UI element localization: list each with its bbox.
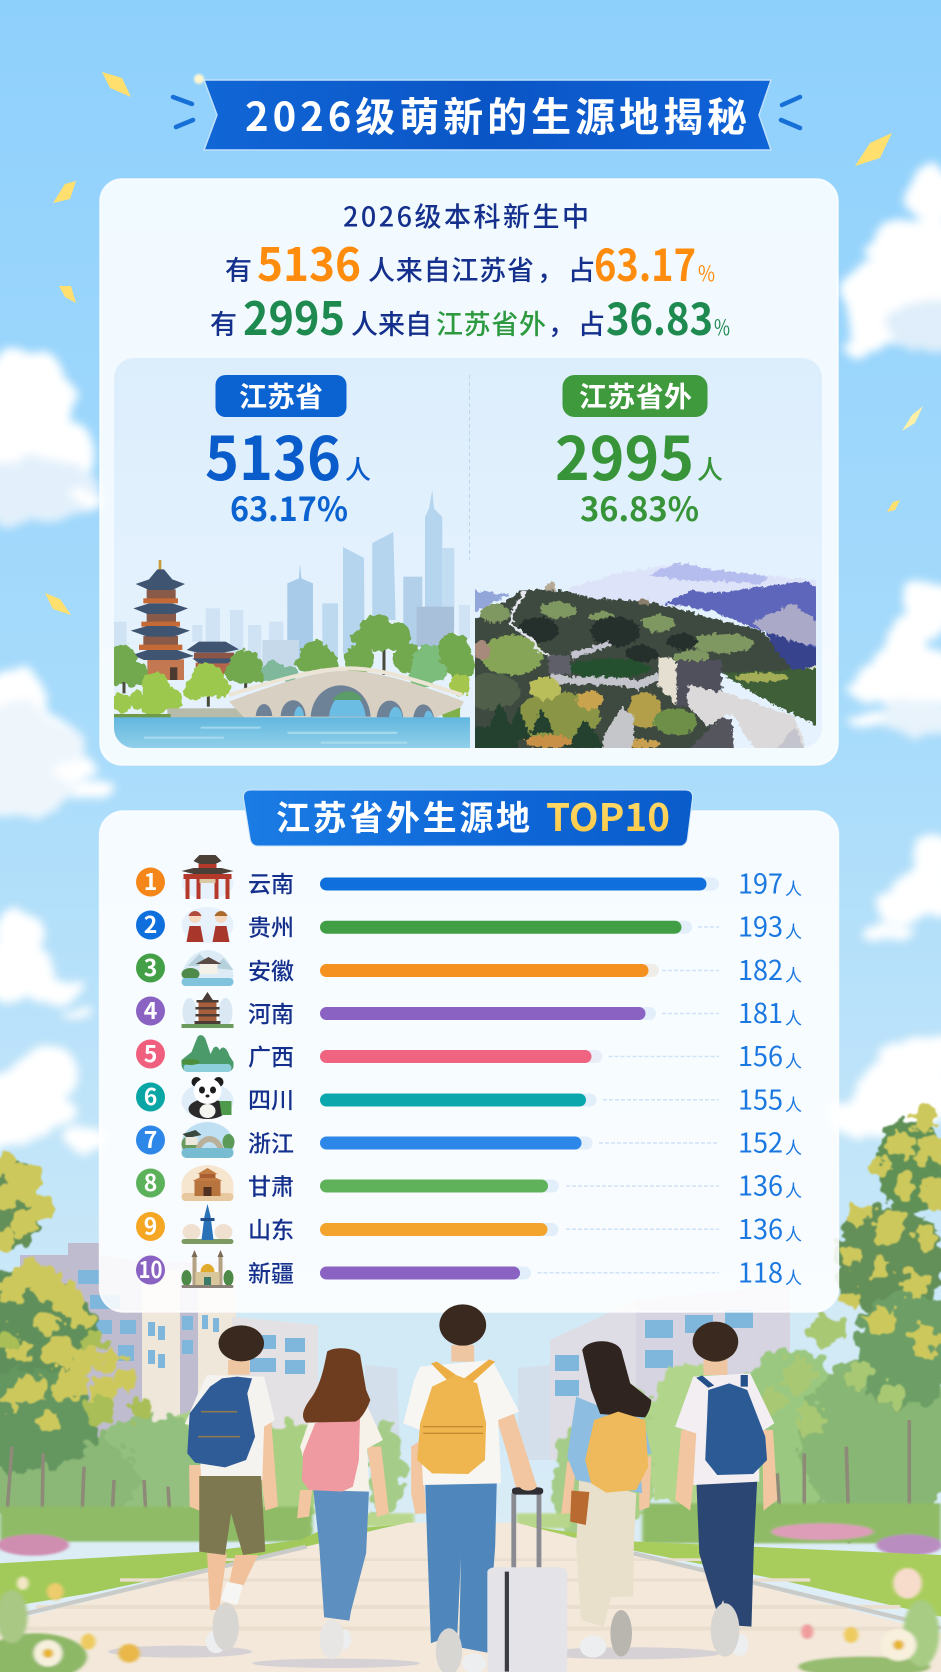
side ticks right [781, 97, 800, 128]
outside Jiangsu sentence [210, 283, 730, 349]
icon: Henan pagoda [182, 992, 234, 1028]
icon: Yunnan memorial gate [182, 855, 234, 899]
Jiangsu sentence [225, 229, 715, 295]
dashed leader [603, 1099, 719, 1101]
label: 甘肃 [248, 1168, 294, 1202]
outside Jiangsu sentence: 36.83 [606, 284, 713, 348]
value: 人 [785, 875, 802, 900]
right column: outside Jiangsu: 人 [697, 450, 723, 487]
label: 新疆 [248, 1254, 294, 1288]
label: 云南 [248, 865, 294, 899]
count: 5136 [205, 411, 341, 498]
Jiangsu sentence: % [698, 258, 715, 288]
value: 人 [785, 1220, 802, 1246]
row 6 四川: 6 [144, 1078, 157, 1112]
icon: Zhejiang water town bridge [182, 1122, 234, 1158]
Jiangsu sentence: 有 [225, 249, 252, 288]
row 5 广西 [136, 1035, 802, 1074]
row 2 贵州 [136, 906, 802, 945]
ground shadows [108, 1646, 720, 1668]
title banner [173, 74, 800, 150]
Jiangsu sentence: ， [537, 249, 564, 288]
bar [320, 921, 692, 934]
panel: overall statistics [100, 179, 838, 765]
value: 人 [785, 1004, 802, 1030]
Jiangsu sentence: 5136 [257, 229, 361, 295]
title text: 2026级萌新的生源地揭秘 [245, 85, 747, 143]
bar [320, 1266, 531, 1280]
value: 152 [738, 1122, 783, 1160]
icon: Guangxi karst peaks [182, 1035, 234, 1072]
value: 197 [738, 862, 783, 902]
panel background [100, 811, 838, 1312]
row 3 安徽 [136, 949, 802, 988]
dashed leader [566, 1228, 719, 1230]
value: 181 [738, 992, 783, 1031]
mid trees [0, 1350, 941, 1540]
student 4: girl with yellow backpack and book [561, 1341, 651, 1658]
ranking header [243, 787, 693, 846]
row 7 浙江: 7 [144, 1121, 157, 1155]
bar [320, 1007, 656, 1020]
kerbs [6, 1547, 941, 1628]
left column: Jiangsu [205, 375, 371, 531]
Jiangsu sentence: 人来自江苏省 [368, 249, 534, 288]
value: 118 [738, 1252, 783, 1290]
count: 2995 [555, 411, 694, 498]
value: 人 [785, 1177, 802, 1202]
row 1 云南: 1 [144, 863, 157, 897]
row 7 浙江 [136, 1121, 802, 1160]
left tree foliage [0, 1152, 153, 1472]
illustration: Great Wall [475, 562, 816, 748]
value: 人 [785, 962, 802, 986]
row 6 四川 [136, 1077, 802, 1119]
value: 人 [785, 1048, 802, 1072]
Jiangsu sentence: 占 [568, 249, 595, 288]
outside Jiangsu sentence: % [714, 312, 730, 342]
row 8 甘肃 [136, 1164, 802, 1204]
value: 人 [785, 1134, 802, 1159]
right tree foliage [762, 1107, 941, 1434]
value: 136 [738, 1164, 783, 1204]
label: 浙江 [248, 1124, 294, 1158]
vertical dashed divider [468, 375, 470, 560]
icon: Xinjiang mosque [182, 1250, 234, 1288]
row 8 甘肃: 8 [144, 1164, 157, 1198]
foreground plants [0, 1568, 939, 1672]
label: 四川 [248, 1081, 294, 1115]
dashed leader [566, 1185, 719, 1187]
row 1 云南 [136, 855, 802, 902]
left buildings [20, 1243, 400, 1460]
label: 安徽 [248, 952, 294, 986]
stone bridge [229, 668, 464, 717]
outside Jiangsu sentence: 人来自 [351, 303, 432, 342]
sparkle [194, 74, 204, 84]
bar [320, 878, 719, 890]
value: 156 [738, 1035, 783, 1074]
dashed leader [662, 970, 719, 972]
value: 人 [785, 1264, 802, 1289]
row 4 河南 [136, 992, 802, 1031]
student 3: centre boy with suitcase [403, 1304, 567, 1672]
ranking header: TOP10 [546, 787, 670, 842]
pagoda [131, 560, 239, 680]
illustration: Jiangsu pagoda, skyline and bridge [102, 490, 475, 750]
row 10 新疆 [136, 1250, 802, 1290]
clouds [0, 167, 941, 1161]
decorative gold stars [45, 72, 923, 615]
label: 广西 [248, 1038, 294, 1072]
outside Jiangsu sentence: 江苏省外 [436, 303, 546, 342]
row 10 新疆: 10 [138, 1251, 162, 1285]
lake water [114, 717, 470, 750]
students walking group [185, 1304, 777, 1672]
dashed leader [599, 1142, 719, 1144]
suitcase [487, 1481, 567, 1672]
intro line: 2026级本科新生中 [343, 196, 589, 234]
comparison sub-panel [114, 358, 822, 748]
bar [320, 1050, 602, 1063]
row 3 安徽: 3 [144, 949, 157, 983]
value: 136 [738, 1208, 783, 1247]
pathway [0, 1523, 941, 1672]
right column: outside Jiangsu: 江苏省外 [579, 376, 692, 416]
outside Jiangsu sentence: 占 [578, 303, 605, 342]
value: 155 [738, 1078, 783, 1118]
bar [320, 964, 659, 977]
dashed leader [608, 1056, 719, 1058]
label: 贵州 [248, 908, 294, 942]
value: 人 [785, 918, 802, 943]
percent: 36.83% [580, 483, 699, 531]
right column: outside Jiangsu [555, 375, 723, 531]
ribbon shape [204, 80, 771, 150]
outside Jiangsu sentence: 2995 [243, 283, 345, 349]
icon: Gansu sandstone palace [182, 1165, 234, 1201]
hedges [0, 1503, 941, 1556]
value: 人 [785, 1091, 802, 1116]
panel: top 10 ranking [100, 787, 838, 1312]
value: 193 [738, 906, 783, 945]
Jiangsu sentence: 63.17 [594, 230, 696, 294]
row 9 山东 [136, 1204, 802, 1247]
row 9 山东: 9 [144, 1208, 157, 1242]
pill label [216, 375, 346, 417]
value: 182 [738, 949, 783, 988]
trees [102, 615, 475, 722]
student 5: boy with navy backpack [675, 1322, 777, 1657]
side ticks left [173, 97, 193, 127]
right buildings [518, 1310, 790, 1460]
icon: Anhui Huangshan village [182, 950, 234, 986]
label: 河南 [248, 995, 294, 1029]
bar [320, 1180, 559, 1192]
lawns [0, 1525, 396, 1608]
pill label [562, 375, 708, 417]
outside Jiangsu sentence: ， [548, 303, 575, 342]
dashed leader [698, 926, 719, 928]
percent: 63.17% [230, 483, 348, 531]
campus scene background [0, 1107, 941, 1672]
label: 山东 [248, 1211, 294, 1245]
row 4 河南: 4 [144, 992, 157, 1026]
dashed leader [538, 1272, 719, 1274]
tree trunks [6, 1420, 909, 1543]
outside Jiangsu sentence: 有 [210, 303, 237, 342]
panel background [100, 179, 838, 765]
left column: Jiangsu: 江苏省 [239, 376, 323, 416]
left column: Jiangsu: 人 [345, 450, 371, 487]
student 2: girl with pink backpack [297, 1348, 389, 1659]
bar [320, 1223, 558, 1236]
student 1: boy with blue backpack [185, 1325, 278, 1653]
icon: Guizhou ethnic couple [182, 907, 234, 943]
dashed leader [662, 1012, 719, 1014]
bar [320, 1136, 592, 1150]
row 5 广西: 5 [144, 1035, 157, 1069]
row 2 贵州: 2 [144, 906, 157, 940]
icon: Sichuan panda [182, 1077, 234, 1119]
ranking header: 江苏省外生源地 [276, 791, 530, 840]
icon: Shandong blue tower [182, 1204, 234, 1244]
bar [320, 1094, 596, 1106]
